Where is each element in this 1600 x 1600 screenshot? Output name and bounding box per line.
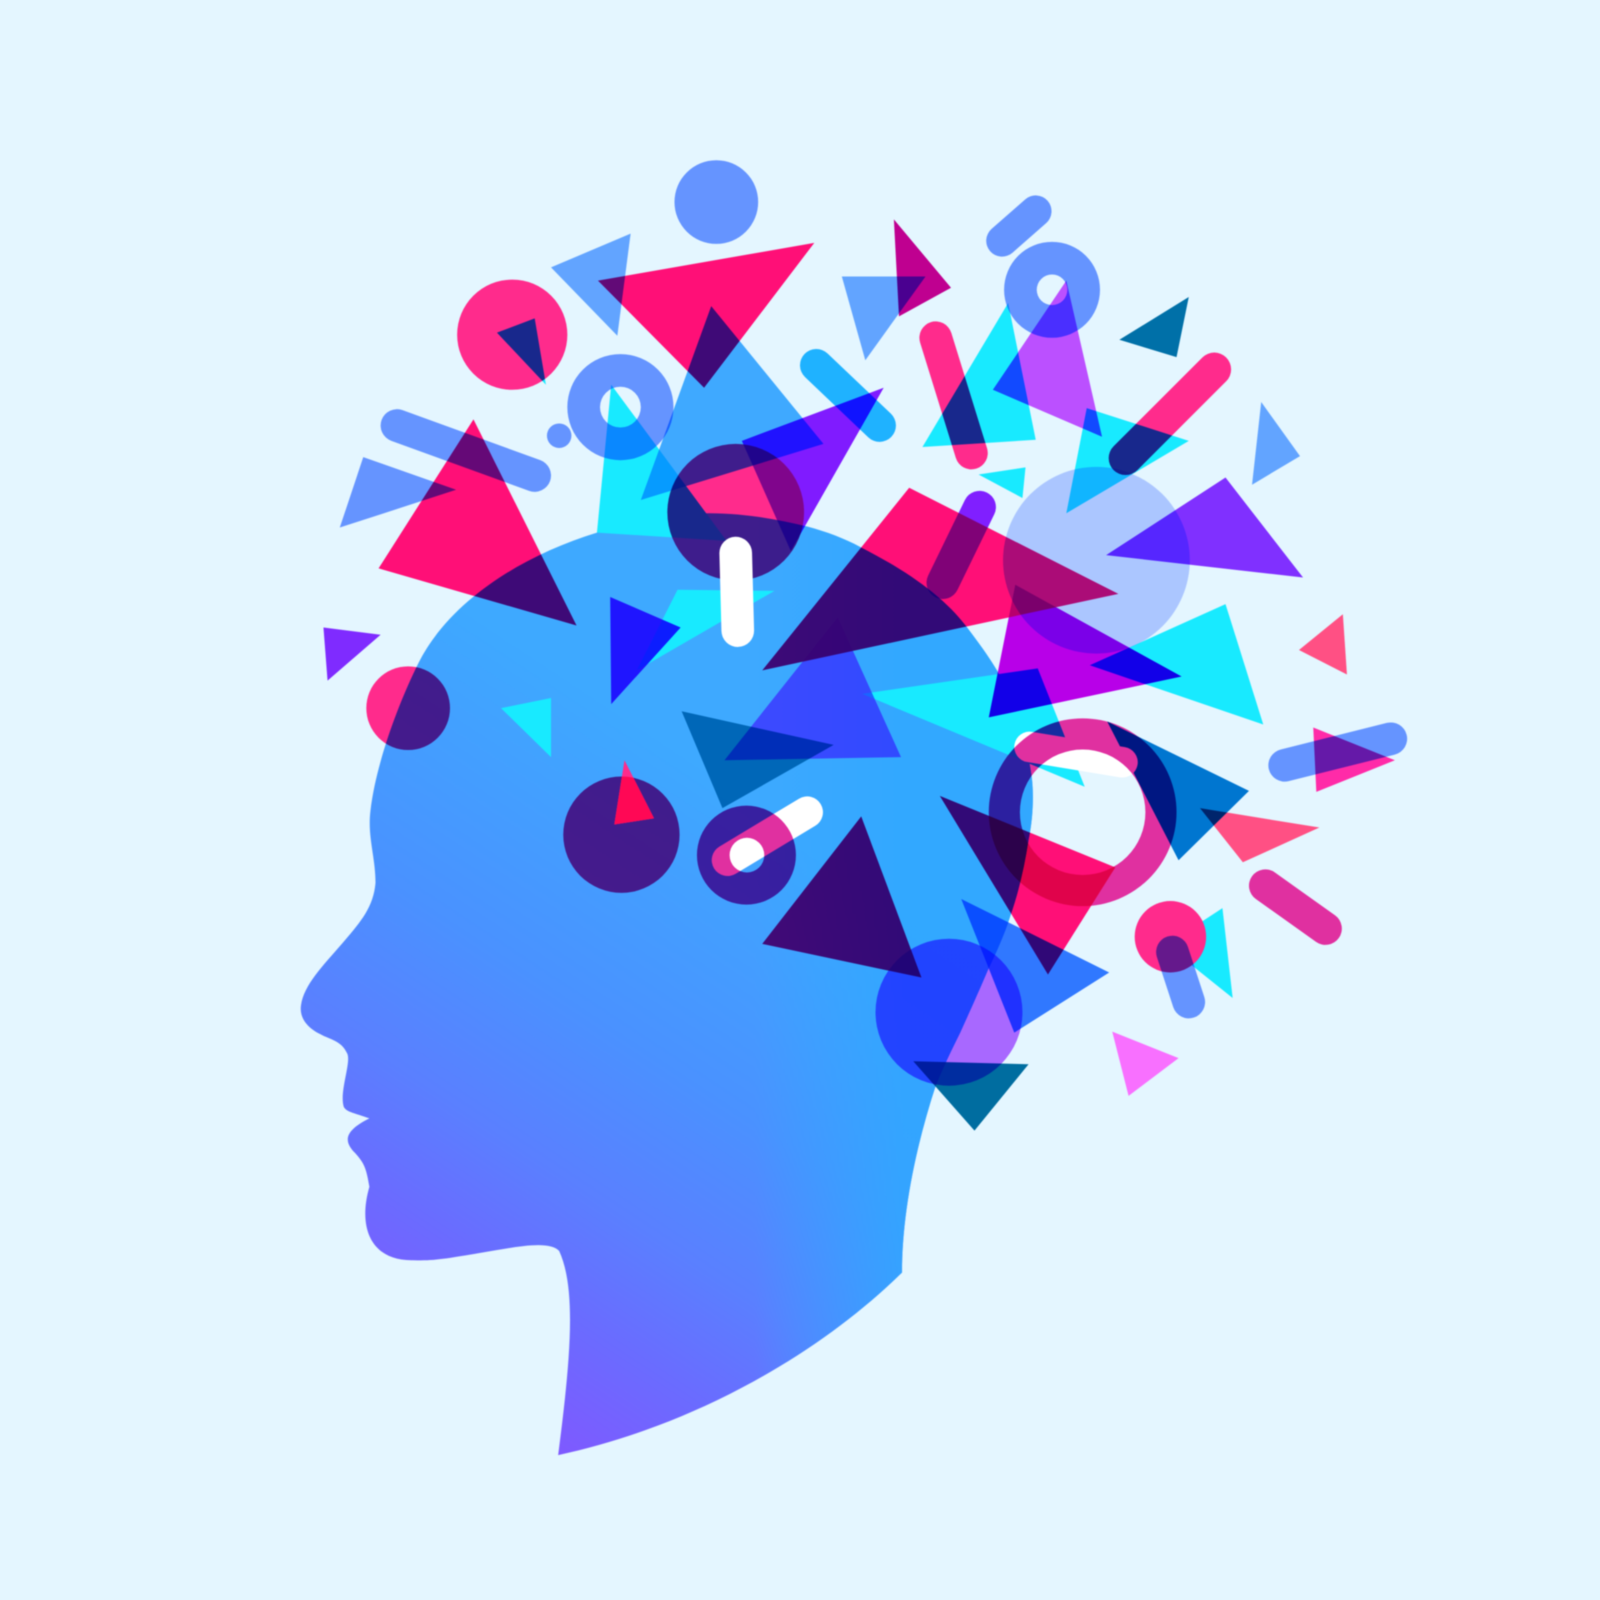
purple triangle centre right [989, 585, 1182, 717]
cyan sliver triangle [979, 467, 1026, 498]
cyan large triangle right [1090, 604, 1263, 724]
pink circle lower right [1135, 901, 1206, 972]
teal triangle on head [682, 711, 834, 808]
small blue dot [547, 423, 571, 448]
light blue triangle top centre [842, 277, 926, 360]
head blue triangle above head [641, 306, 823, 500]
pale blue large circle [1003, 467, 1190, 654]
head right-side light glow [301, 513, 1033, 1455]
pink pill upper [936, 338, 971, 453]
teal triangle top right [1119, 297, 1189, 357]
coral triangle far right [1299, 614, 1347, 674]
orchid triangle [993, 281, 1102, 437]
violet triangle right [1106, 478, 1303, 578]
large magenta ring [989, 718, 1177, 906]
blue pill lower right [1172, 952, 1189, 1002]
blue triangle left [340, 457, 456, 528]
blue triangle right of ring [1107, 721, 1249, 860]
violet triangle on head [610, 597, 681, 704]
dark triangle on head [762, 816, 921, 978]
cyan triangle behind ring [597, 385, 727, 541]
red triangle under ring [940, 796, 1115, 974]
lilac triangle on head [724, 617, 901, 760]
lilac circle lower [876, 939, 1022, 1086]
pink pill right [1126, 369, 1214, 458]
sky pill [816, 365, 880, 426]
big red triangle [762, 488, 1118, 670]
magenta pill lower right [1265, 886, 1326, 929]
pink circle top of head [667, 444, 804, 581]
violet triangle far left [323, 628, 381, 681]
light blue triangle top left [551, 234, 631, 336]
cyan triangle lower right [1166, 908, 1233, 998]
blue triangle lower [961, 899, 1109, 1033]
cyan triangle right [1066, 408, 1189, 513]
cyan triangle upper right [922, 303, 1036, 447]
red triangle top [598, 243, 814, 388]
blue pill left [397, 426, 535, 476]
head silhouette [301, 513, 1033, 1455]
white pill lower [728, 812, 807, 860]
teal triangle bottom [913, 1061, 1029, 1131]
blue pill far right [1285, 739, 1391, 765]
light blue triangle far right [1252, 402, 1300, 485]
orchid triangle bottom right [1112, 1032, 1179, 1096]
magenta ring on head [697, 806, 796, 905]
magenta triangle top [894, 219, 951, 316]
pink circle top left [457, 280, 567, 390]
pink triangle over dark circle [614, 760, 654, 824]
blue pill top right [1002, 211, 1036, 241]
dark circle on head [563, 777, 680, 893]
violet pill [943, 507, 980, 583]
blue circle top [674, 160, 758, 244]
white pill top of head [736, 553, 738, 631]
coral triangle by blue triangle [1200, 808, 1319, 862]
pink circle on forehead edge [366, 666, 450, 750]
red triangle left [379, 419, 577, 626]
cyan triangle inside pink circle [497, 318, 546, 385]
pink triangle far right [1313, 728, 1395, 792]
white pill on ring [1030, 747, 1122, 762]
blue ring top right [1004, 242, 1100, 338]
red part of triangle inside circle [614, 776, 654, 825]
cyan wedge over head [862, 668, 1085, 787]
blue ring top left [567, 354, 673, 460]
cyan triangle centre [637, 590, 774, 670]
violet triangle top centre [742, 388, 884, 551]
cyan triangle small left [501, 698, 551, 757]
illustration: head with flying geometric shapes [300, 160, 1408, 1456]
